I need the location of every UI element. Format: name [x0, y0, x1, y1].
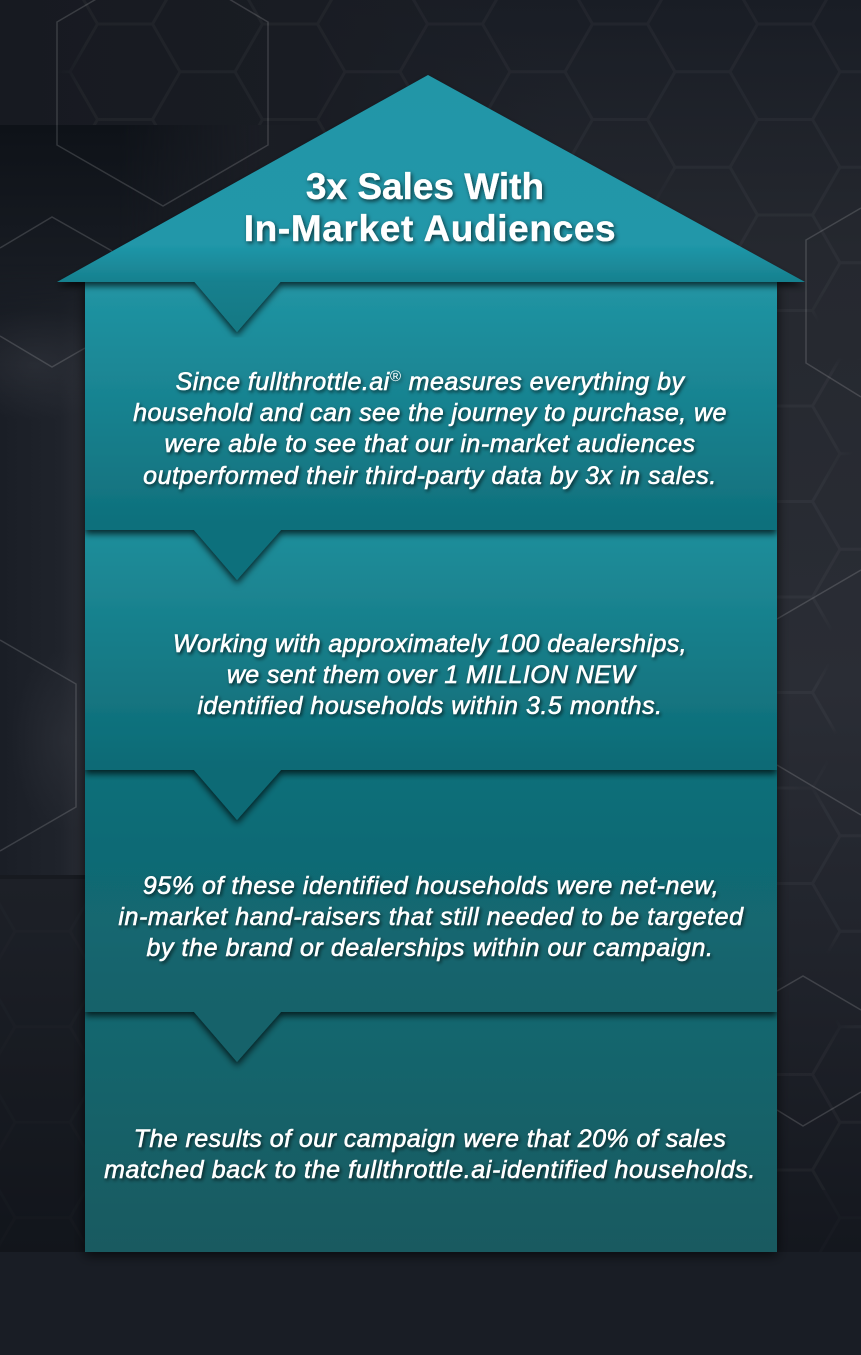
- text: dealerships: we sent them over 1 MILLION NEW: [227, 661, 637, 689]
- panel: roof header: [57, 75, 805, 332]
- panel: step 1 household measurement: [85, 282, 777, 580]
- text: household measurement: ®: [390, 368, 402, 385]
- text: household measurement: outperformed their third-party data by 3x in sales.: [143, 462, 717, 490]
- text: results: matched back to the fullthrottle.ai-identified households.: [104, 1156, 756, 1184]
- roof arrow notch shadow: [194, 281, 281, 332]
- text: net-new: 95% of these identified households were net-new,: [143, 872, 719, 900]
- text: household measurement: Since fullthrottle.ai: [176, 368, 685, 396]
- panel: step 2 dealerships: [85, 530, 777, 820]
- text: net-new: by the brand or dealerships within our campaign.: [146, 934, 714, 962]
- text: results: The results of our campaign were that 20% of sales: [134, 1125, 726, 1153]
- text: dealerships: Working with approximately 100 dealerships,: [173, 630, 687, 658]
- text: household measurement: were able to see that our in-market audiences: [164, 430, 696, 458]
- text: dealerships: identified households within 3.5 months.: [197, 692, 663, 720]
- panel: step 3 net-new: [85, 862, 777, 1068]
- text: household measurement: measures everything by: [401, 368, 685, 396]
- roof triangle: [57, 75, 805, 282]
- roof arrow notch: [194, 282, 281, 332]
- text: net-new: in-market hand-raisers that still needed to be targeted: [118, 903, 744, 931]
- title: In-Market Audiences: [244, 208, 616, 249]
- panel: step 4 results: [85, 1012, 777, 1252]
- title: 3x Sales With: [306, 166, 544, 207]
- text: household measurement: household and can see the journey to purchase, we: [133, 399, 727, 427]
- panel: outer box shadow: [85, 282, 777, 1252]
